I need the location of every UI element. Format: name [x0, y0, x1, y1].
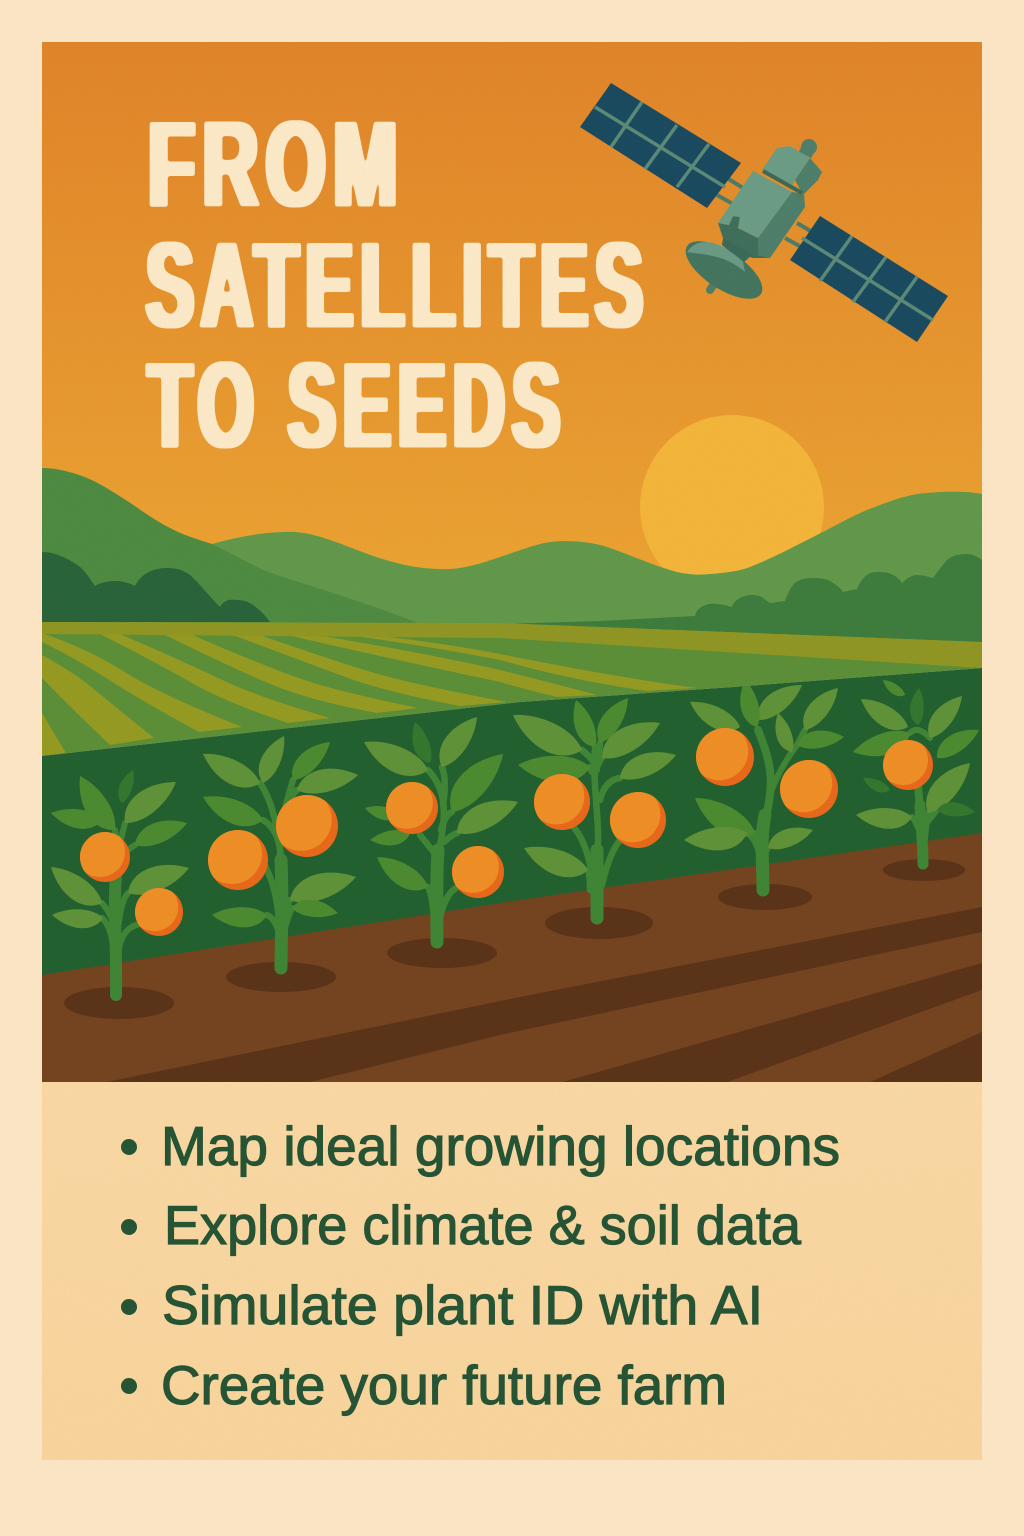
soil furrows	[107, 907, 982, 1082]
plant row	[43, 675, 983, 1019]
field: top band	[42, 622, 982, 668]
satellite arms	[717, 178, 812, 248]
left tree line	[42, 552, 270, 622]
plant 3	[358, 709, 522, 968]
plant 1	[43, 768, 193, 1019]
bullet: explore: Explore climate & soil data	[164, 1194, 801, 1256]
right tree line	[500, 554, 982, 645]
left hill	[42, 468, 418, 623]
field: base	[42, 622, 982, 756]
solar panel right	[790, 216, 948, 342]
icon: satellite	[580, 83, 948, 342]
heading: TO SEEDS	[148, 337, 567, 473]
sky	[42, 42, 982, 642]
panel: feature list	[42, 1082, 982, 1460]
satellite dish	[677, 230, 771, 310]
middle hills	[180, 492, 982, 640]
heading: SATELLITES	[146, 217, 650, 353]
sun	[640, 415, 824, 599]
satellite body	[718, 139, 822, 258]
hedge band	[42, 668, 982, 980]
solar panel left	[580, 83, 741, 208]
bullet: map: Map ideal growing locations	[161, 1115, 840, 1177]
plant 5	[683, 675, 845, 910]
soil	[42, 833, 982, 1082]
field: crop stripes	[42, 633, 697, 756]
heading	[146, 96, 650, 473]
bullet: create: Create your future farm	[161, 1354, 727, 1416]
heading: FROM	[148, 96, 405, 232]
plant 2	[196, 731, 360, 992]
plant 4	[505, 692, 679, 939]
plant 6	[850, 677, 983, 881]
bullet: simulate: Simulate plant ID with AI	[162, 1274, 763, 1336]
